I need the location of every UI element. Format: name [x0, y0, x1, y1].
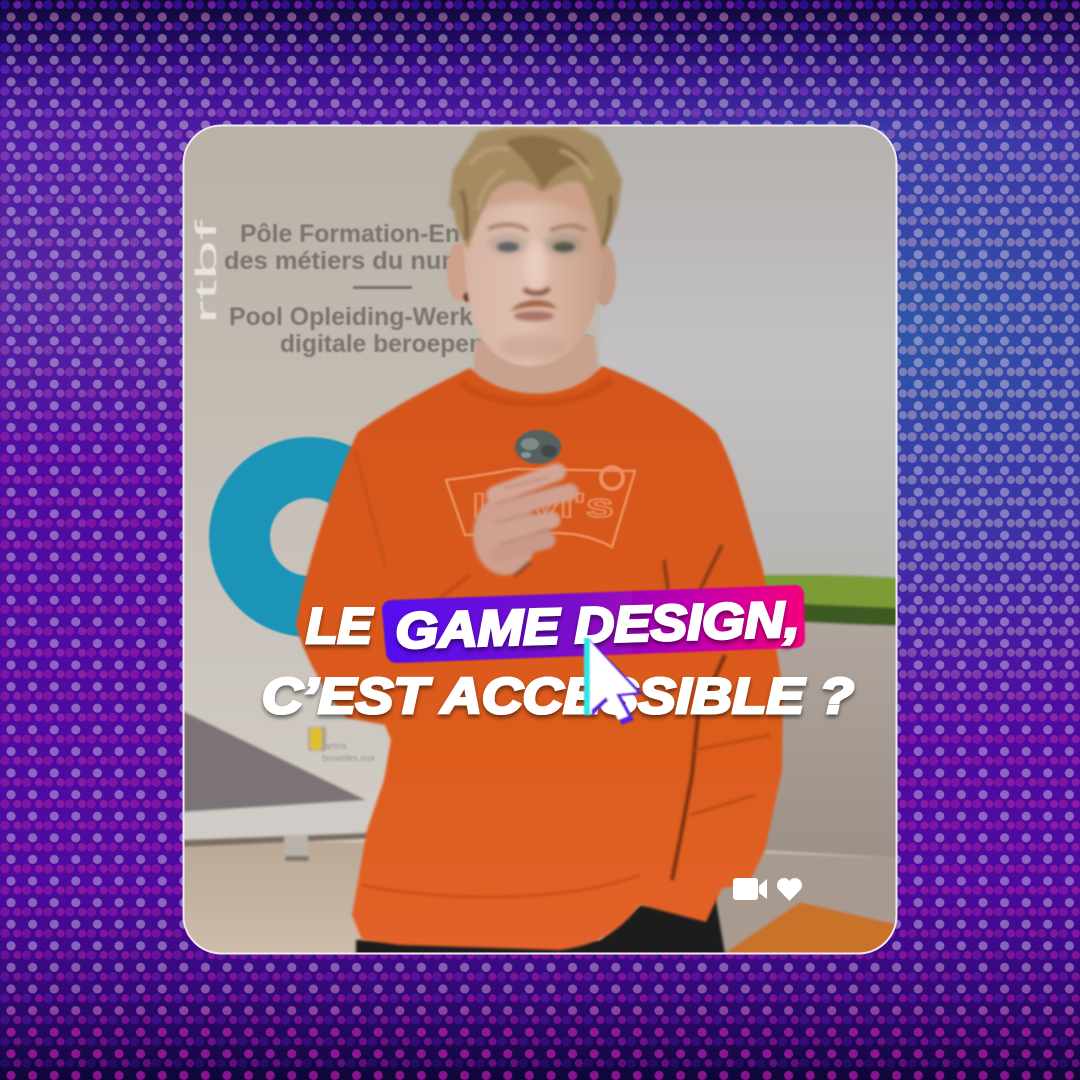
rtbf logo: rtbf	[190, 218, 223, 324]
banner text: Pôle Formation-En	[240, 220, 460, 248]
icon: blue ring logo	[240, 468, 378, 606]
sweater logo: Levi's	[472, 487, 614, 525]
card border	[184, 126, 896, 954]
neck	[472, 335, 600, 400]
icon: video camera	[733, 878, 767, 900]
sweater collar and folds	[355, 380, 770, 897]
headline line 1: LE	[306, 598, 374, 654]
sponsor logo text: bruxelles.eux	[322, 753, 376, 763]
face shading	[484, 181, 588, 360]
trousers	[354, 898, 727, 952]
photo: room backdrop	[180, 120, 900, 960]
banner text: digitale beroepen	[280, 330, 484, 358]
hair	[449, 126, 622, 252]
sponsor logo text	[322, 742, 375, 762]
icon: mouse cursor	[584, 638, 643, 725]
ears and earring	[447, 190, 616, 366]
banner text: Pool Opleiding-Werk	[229, 303, 473, 331]
head	[447, 126, 622, 366]
sweater	[296, 366, 783, 950]
headline line 1: GAME DESIGN,	[395, 591, 800, 659]
headline line 2: C’EST ACCESSIBLE ?	[262, 668, 854, 724]
sponsor logo text: artiris	[325, 741, 347, 751]
microphone	[515, 430, 561, 464]
icon: heart	[777, 878, 802, 901]
banner text	[224, 220, 484, 358]
hand	[473, 472, 570, 575]
headline callout	[262, 585, 854, 724]
sweater logo	[446, 467, 635, 547]
panel: video still card	[180, 120, 900, 960]
banner text: des métiers du num	[224, 247, 464, 275]
eyes, brows, nose, mouth	[488, 225, 586, 321]
highlight bar	[382, 585, 805, 663]
person	[296, 126, 783, 960]
